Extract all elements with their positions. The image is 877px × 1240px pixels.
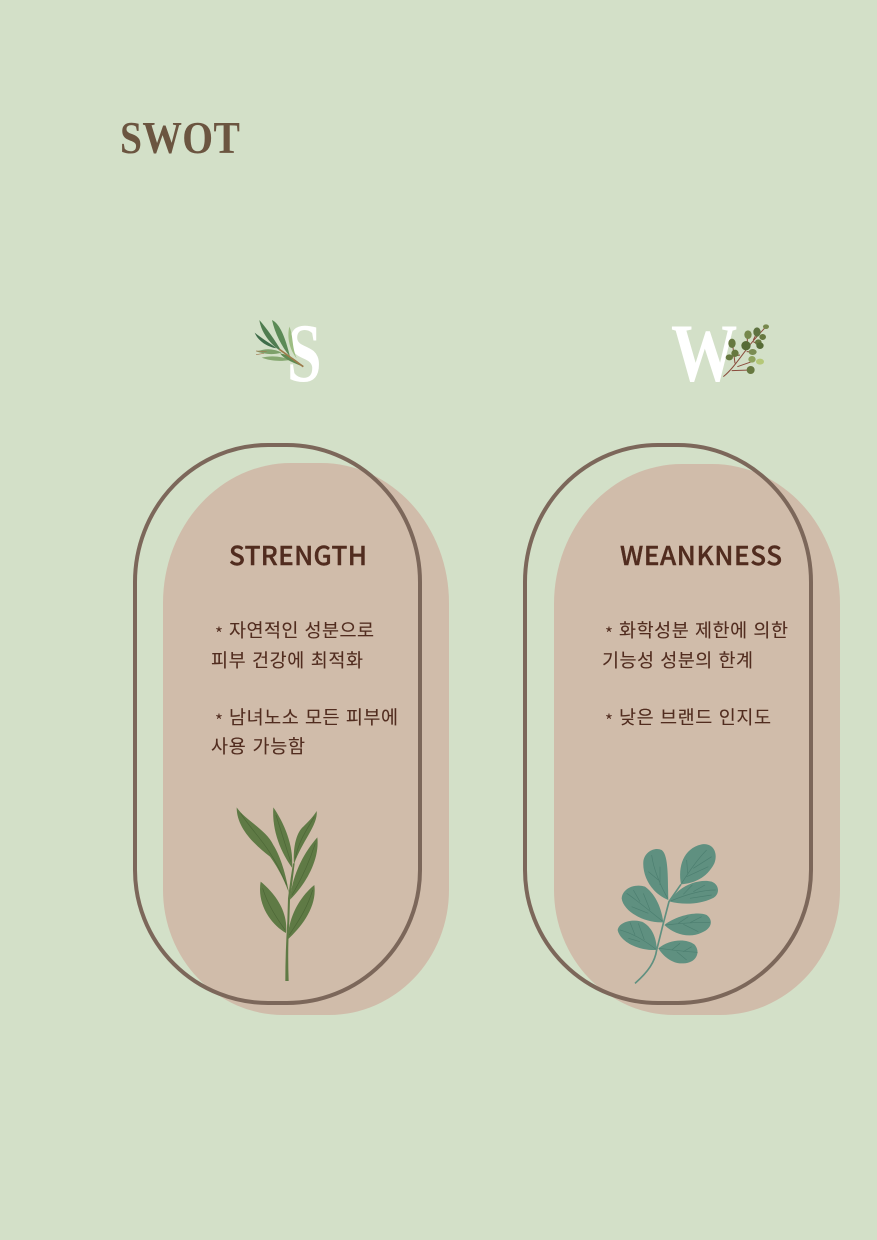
text block: weakness points: 낮은 브랜드 인지도 xyxy=(619,704,771,730)
text block: strength points: 피부 건강에 최적화 xyxy=(211,647,363,673)
text block: weakness points: * xyxy=(605,620,613,645)
heading: weakness: WEANKNESS xyxy=(620,536,782,573)
icon: eucalyptus branch xyxy=(723,324,769,377)
panel outline: strength xyxy=(135,445,420,1003)
letter W: W xyxy=(671,308,737,400)
icon: W letter with eucalyptus xyxy=(671,308,769,400)
icon: teal leaf sprig xyxy=(618,844,718,983)
panel: strength xyxy=(135,445,449,1015)
text block: weakness points: 화학성분 제한에 의한 xyxy=(619,617,788,643)
text block: strength points: 자연적인 성분으로 xyxy=(229,617,374,643)
panel background: strength xyxy=(163,463,449,1015)
icon: rosemary sprig xyxy=(255,320,303,367)
icon: S letter with rosemary xyxy=(255,306,322,399)
panel background: weakness xyxy=(554,464,840,1015)
panel outline: weakness xyxy=(525,445,811,1003)
heading: strength: STRENGTH xyxy=(229,536,367,573)
text block: strength points: * xyxy=(215,620,223,645)
text block: weakness points: 기능성 성분의 한계 xyxy=(602,647,753,673)
text block: strength points: 사용 가능함 xyxy=(211,733,305,759)
text block: strength points: * xyxy=(215,707,223,732)
text block: strength points: 남녀노소 모든 피부에 xyxy=(229,704,398,730)
icon: willow branch xyxy=(237,807,318,981)
panel: weakness xyxy=(525,445,840,1015)
title: SWOT xyxy=(120,114,240,164)
text block: strength points xyxy=(211,617,398,759)
text block: weakness points: * xyxy=(605,707,613,732)
text block: weakness points xyxy=(602,617,788,732)
letter S: S xyxy=(287,306,322,399)
